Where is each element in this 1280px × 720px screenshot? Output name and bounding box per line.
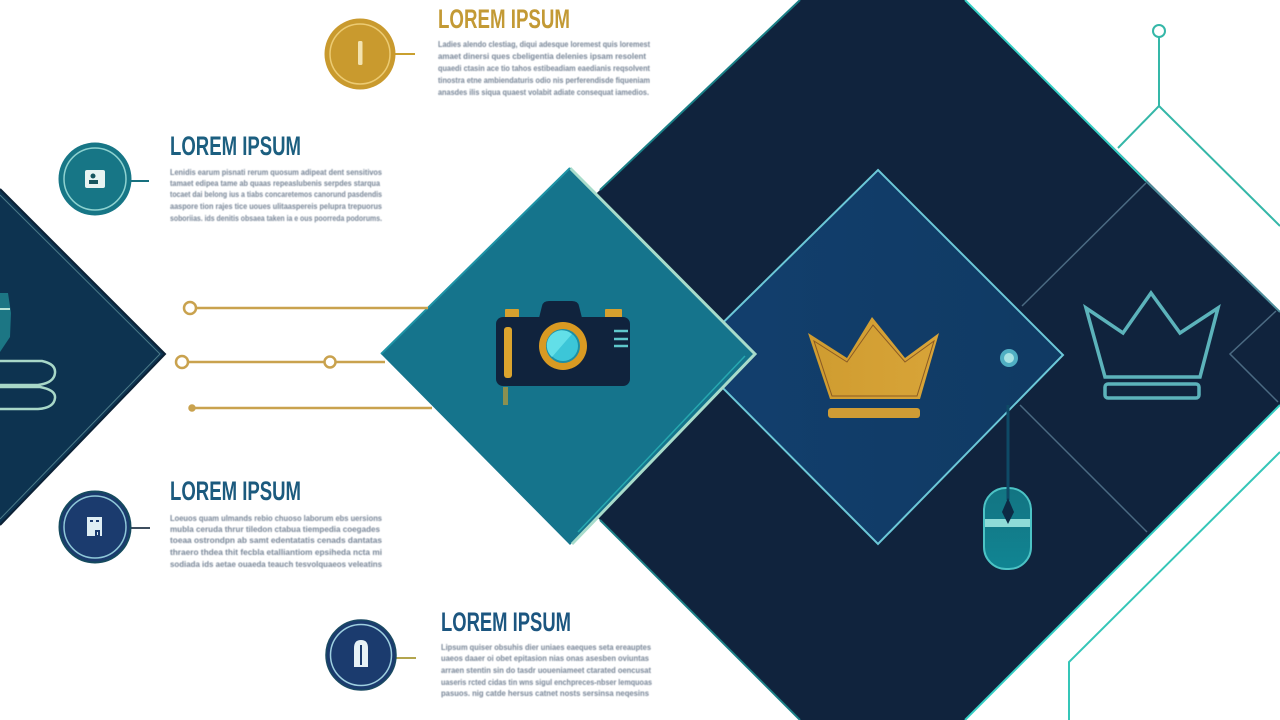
body text: uaseris rcted cidas tin wns sigul enchpreces-nbser lemquoas [441,677,652,687]
item 4: navy lock block [326,607,652,698]
body text: Loeuos quam ulmands rebio chuoso laborum ebs uersions [170,513,382,523]
connector lines [176,302,432,410]
heading: LOREM IPSUM [170,131,301,161]
heading: LOREM IPSUM [170,476,301,506]
panel: teal camera diamond [381,168,755,545]
body text: arraen stentin sin do tasdr uoueniameet ctarated oencusat [441,665,651,675]
large dark diamond [427,0,1280,720]
body text [170,513,382,569]
body text: amaet dinersi ques cbeligentia delenies ipsam resolent [438,51,646,61]
body text: Ladies alendo clestiag, diqui adesque loremest quis loremest [438,39,650,49]
body text: tamaet edipea tame ab quaas repeaslubenis serpdes starqua [170,178,380,188]
body text: pasuos. nig catde hersus catnet nosts sersinsa neqesins [441,688,649,698]
body text [170,167,382,223]
icon: gold crown [808,317,939,418]
marker dot [1000,349,1018,367]
body text: sodiada ids aetae ouaeda teauch tesvolquaeos veleatins [170,559,382,569]
body text: mubla ceruda thrur tiledon ctabua tiempedia coegades [170,524,380,534]
body text: uaeos daaer oi obet epitasion nias onas asesben oviuntas [441,653,649,663]
body text: toeaa ostrondpn ab samt edentatatis cenads dantatas [170,535,382,545]
icon: cable plug [0,293,55,409]
panel: left dark diamond [0,189,165,525]
body text: quaedi ctasin ace tio tahos estibeadiam eaedianis reqsolvent [438,63,650,73]
icon: teal badge [58,142,149,216]
body text: Lenidis earum pisnati rerum quosum adipeat dent sensitivos [170,167,382,177]
icon: outlined crown [1086,293,1218,398]
body text: aaspore tion rajes tice uoues ulitaaspereis pelupra trepuorus [170,201,382,211]
heading: LOREM IPSUM [441,607,571,637]
blue centre diamond [690,170,1063,544]
heading: LOREM IPSUM [438,4,570,34]
body text: Lipsum quiser obsuhis dier uniaes eaeques seta ereauptes [441,642,651,652]
icon: navy badge [60,492,150,562]
body text: soboriias. ids denitis obsaea taken ia e ous poorreda podorums. [170,213,382,223]
item 3: navy block [60,476,382,569]
icon: lock badge [326,620,416,690]
icon: gold badge [324,18,415,90]
item 1: gold block [324,4,650,97]
body text: tocaet dai belong ius a tiabs concaretemos canorund pasdendis [170,189,382,199]
inner right diamond outlines [1020,183,1278,532]
icon: camera [496,301,630,405]
icon: mouse [984,405,1031,569]
bottom right circuit line [1069,452,1280,720]
body text [438,39,650,97]
item 2: teal block [58,131,382,223]
body text: anasdes ilis siqua quaest volabit adiate consequat iamedios. [438,87,649,97]
body text [441,642,652,698]
top right circuit lines [1118,25,1280,226]
body text: thraero thdea thit fecbla etalliantiom epsiheda ncta mi [170,547,382,557]
body text: tinostra etne ambiendaturis odio nis perferendisde fiqueniam [438,75,650,85]
